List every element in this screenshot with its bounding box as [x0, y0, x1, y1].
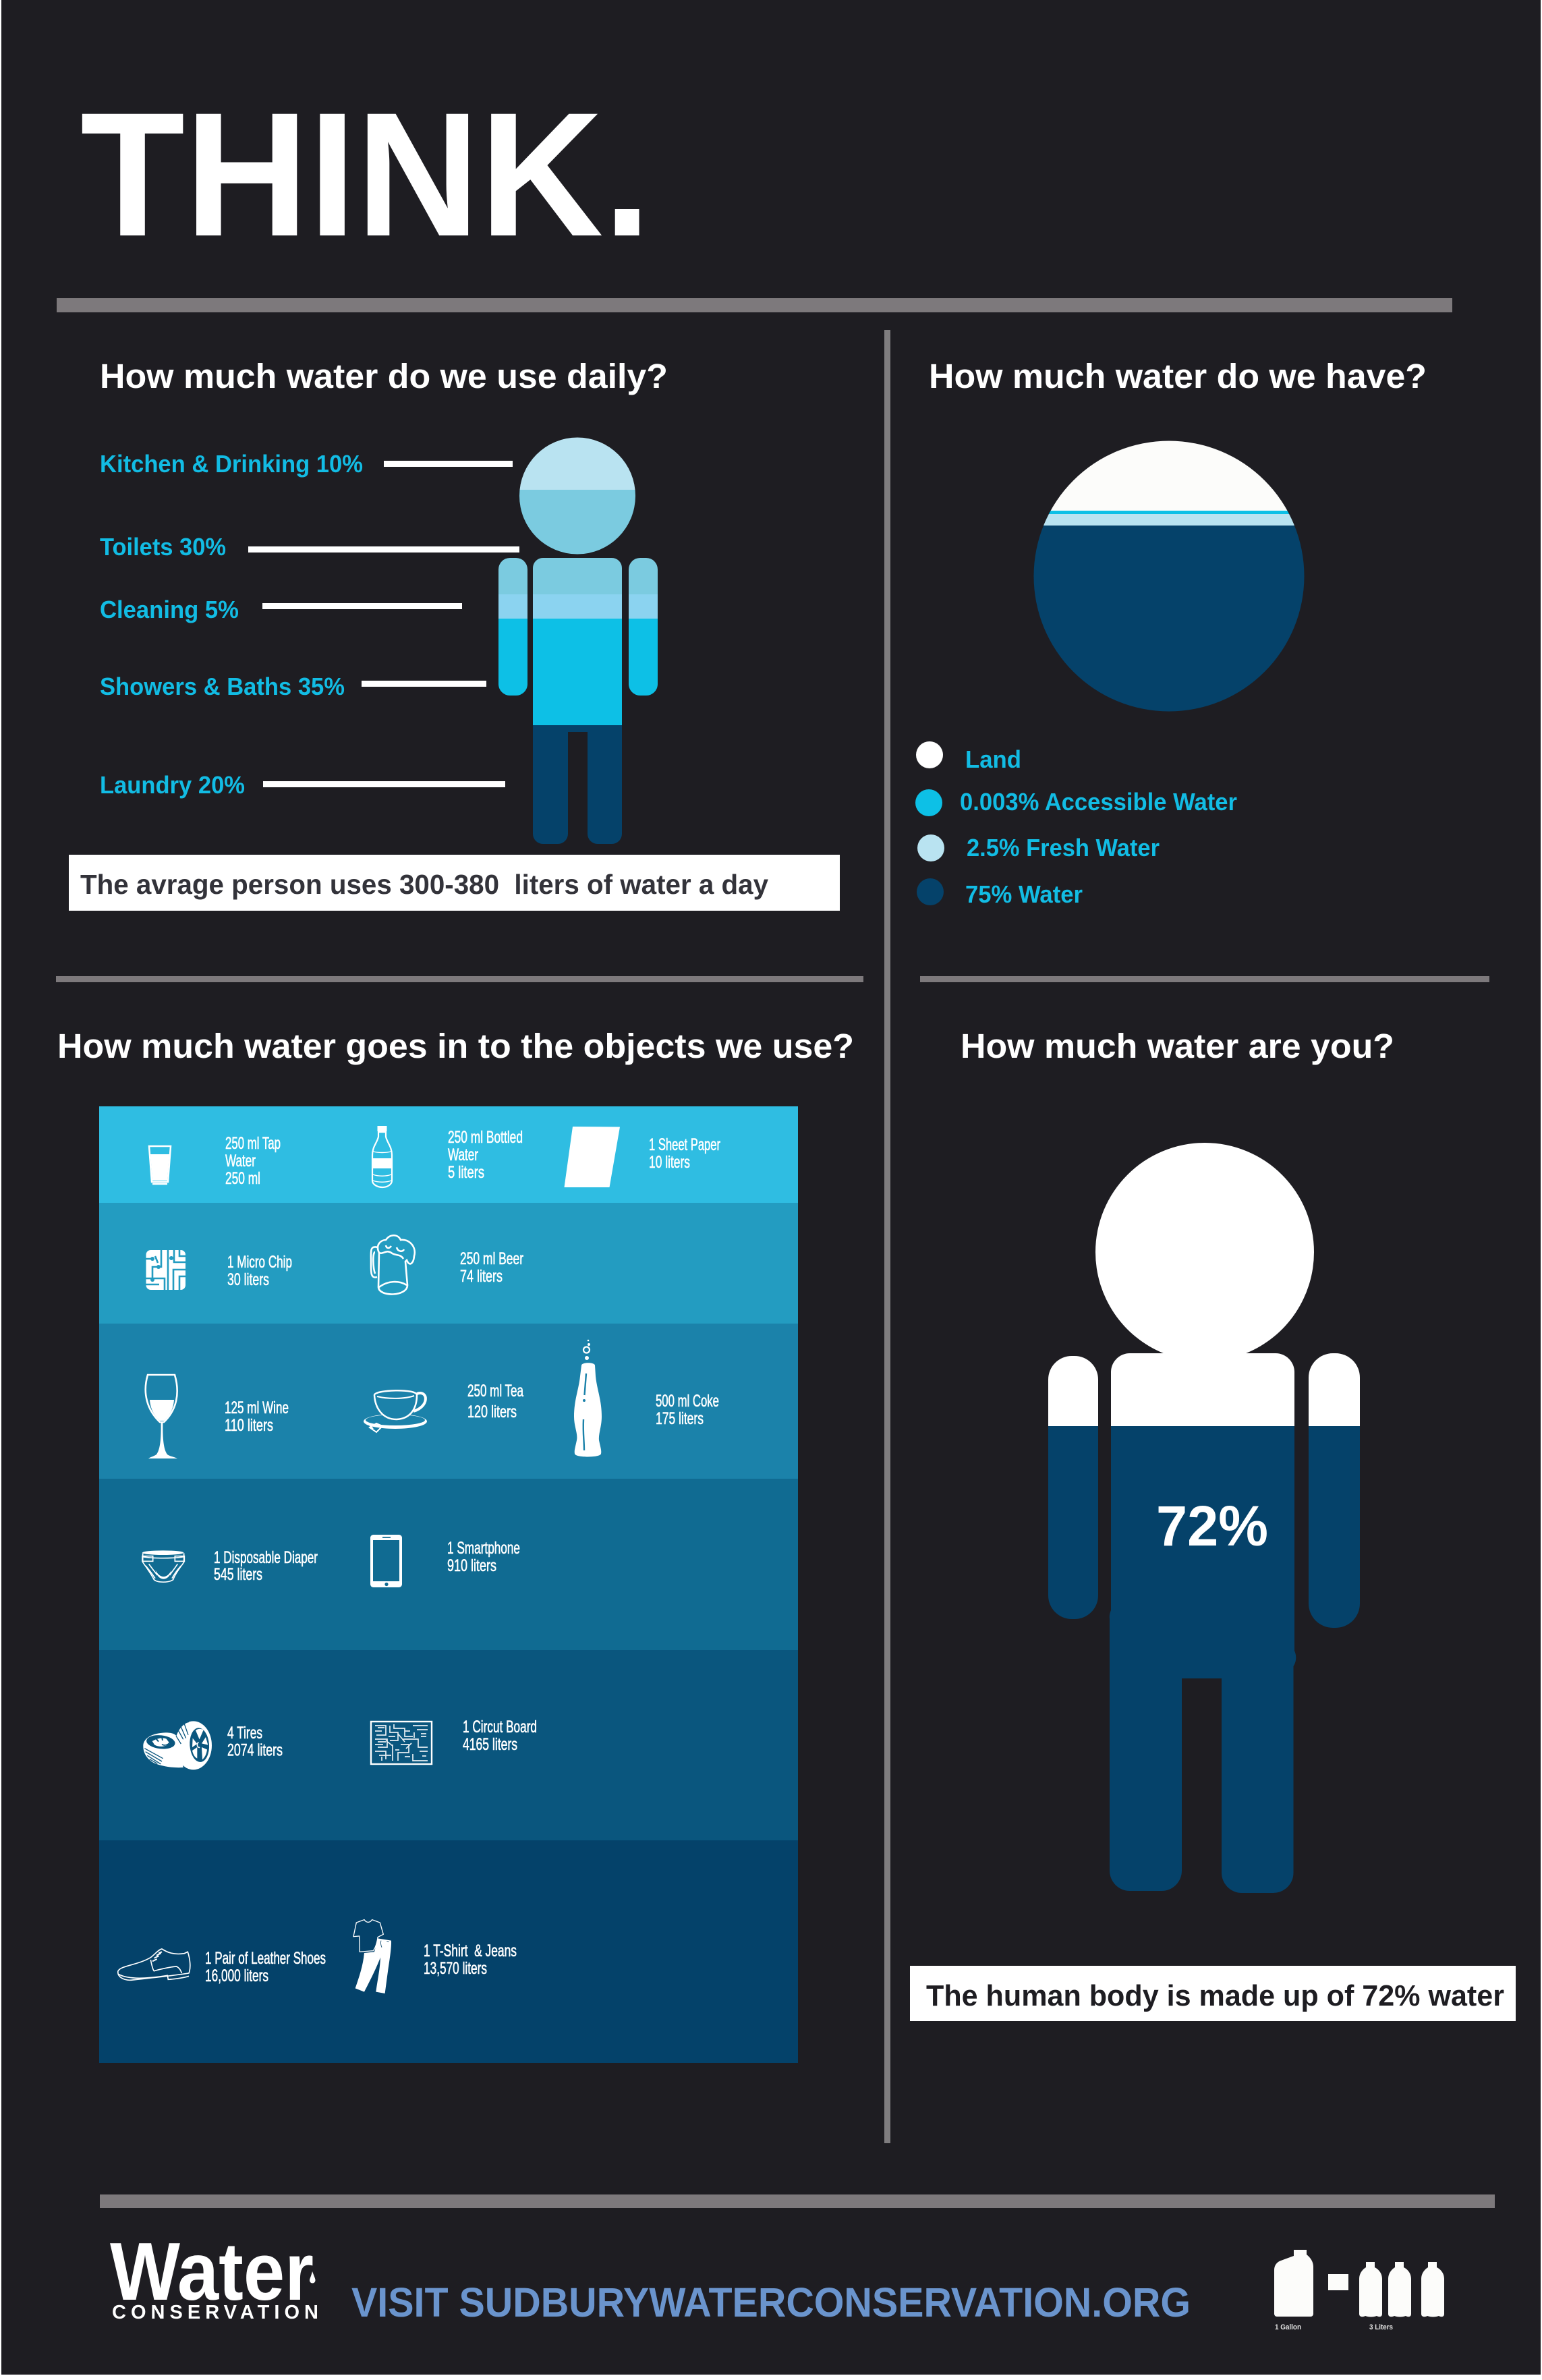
icon: circuit board	[371, 1722, 432, 1764]
legend: 75% Water	[965, 880, 1083, 908]
heading: daily use: How much water do we use daily?	[100, 357, 668, 395]
text: wine	[225, 1398, 289, 1435]
legend	[915, 741, 1237, 908]
text: coke	[656, 1392, 719, 1428]
logo: water conservation: CONSERVATION	[112, 2302, 318, 2323]
icon: smartphone	[370, 1535, 402, 1587]
text: circuit board	[463, 1718, 537, 1754]
text: beer: 250 ml Beer	[460, 1249, 523, 1268]
text: t-shirt and jeans: 13,570 liters	[424, 1959, 487, 1978]
text: tap water: 250 ml Tap	[225, 1134, 281, 1153]
icon: water glass	[149, 1146, 171, 1184]
text: beer	[460, 1249, 523, 1286]
legend: Land	[965, 745, 1021, 773]
text: smartphone: 910 liters	[447, 1556, 496, 1575]
text: diaper	[214, 1548, 318, 1584]
icon: gallon equals three liters	[1274, 2250, 1444, 2331]
text: t-shirt and jeans: 1 T-Shirt & Jeans	[424, 1942, 517, 1960]
text: tea: 250 ml Tea	[467, 1382, 523, 1400]
text: tap water	[225, 1134, 281, 1188]
text: coke: 175 liters	[656, 1409, 704, 1428]
text: circuit board: 4165 liters	[463, 1735, 517, 1754]
text: leather shoes	[205, 1949, 326, 1985]
text: leather shoes: 16,000 liters	[205, 1966, 268, 1985]
text: paper	[649, 1135, 720, 1172]
text: tires: 4 Tires	[227, 1724, 262, 1743]
figure: person 72 percent water	[1046, 1140, 1369, 1898]
text: bottled water: 5 liters	[448, 1163, 484, 1182]
text: leather shoes: 1 Pair of Leather Shoes	[205, 1949, 326, 1968]
text: wine: 125 ml Wine	[225, 1398, 289, 1417]
label: cleaning: Cleaning 5%	[100, 596, 239, 623]
panel: how much water are you	[910, 1027, 1516, 2021]
callout: average use	[69, 855, 840, 911]
icon: t-shirt and jeans	[353, 1920, 391, 1993]
footer	[110, 2226, 1444, 2331]
figure: person split by usage	[492, 437, 661, 847]
callout: human body: The human body is made up of 72% water	[926, 1979, 1504, 2012]
text: micro chip	[227, 1253, 292, 1289]
text: tap water: 250 ml	[225, 1169, 260, 1188]
text: tap water: Water	[225, 1152, 256, 1170]
text: tea: 120 liters	[467, 1402, 517, 1421]
icon: tires	[143, 1721, 212, 1769]
label: kitchen: Kitchen & Drinking 10%	[100, 450, 363, 478]
label: showers: Showers & Baths 35%	[100, 673, 345, 700]
label: toilets: Toilets 30%	[100, 533, 226, 561]
text: paper: 10 liters	[649, 1153, 690, 1172]
leader lines	[248, 461, 519, 787]
icon: gallon equals three liters: 1 Gallon	[1275, 2323, 1301, 2331]
icon: gallon equals three liters: 3 Liters	[1369, 2323, 1393, 2331]
text: wine: 110 liters	[225, 1416, 273, 1435]
text: bottled water	[448, 1128, 523, 1182]
text: circuit board: 1 Circut Board	[463, 1718, 537, 1736]
link text: VISIT SUDBURYWATERCONSERVATION.ORG	[351, 2279, 1191, 2325]
heading: objects: How much water goes in to the objects we use?	[57, 1027, 854, 1065]
chart: earth water circle	[1032, 438, 1309, 714]
callout: average use: The avrage person uses 300-380 liters of water a day	[80, 869, 768, 900]
panel: embedded water in objects	[57, 1027, 854, 2063]
text: diaper: 545 liters	[214, 1565, 262, 1584]
icon: sheet of paper	[564, 1127, 620, 1187]
text: tires: 2074 liters	[227, 1740, 283, 1759]
icon: wine glass	[146, 1375, 177, 1458]
logo: water conservation: Water	[110, 2226, 314, 2317]
icon: micro chip	[146, 1250, 185, 1290]
heading: water we have: How much water do we have?	[929, 357, 1427, 395]
title: THINK.	[80, 76, 651, 273]
icon: leather shoe	[118, 1949, 190, 1980]
icon: diaper	[142, 1550, 184, 1582]
text: micro chip: 30 liters	[227, 1270, 269, 1289]
value: 72%: 72%	[1156, 1494, 1268, 1558]
icon: coke bottle	[574, 1340, 602, 1457]
text: smartphone	[447, 1539, 520, 1575]
callout: human body	[910, 1966, 1516, 2021]
icon: beer mug	[371, 1235, 415, 1295]
text: beer: 74 liters	[460, 1267, 503, 1286]
icon: tea cup	[364, 1390, 427, 1432]
text: t-shirt and jeans	[424, 1942, 517, 1978]
panel: how much water we have	[915, 357, 1427, 908]
text: tires	[227, 1724, 283, 1759]
legend: 2.5% Fresh Water	[967, 834, 1160, 861]
text: coke: 500 ml Coke	[656, 1392, 719, 1411]
table bands	[99, 1106, 798, 2063]
text: tea	[467, 1382, 523, 1421]
panel: daily water use	[69, 357, 840, 911]
heading: water are you: How much water are you?	[961, 1027, 1394, 1065]
text: diaper: 1 Disposable Diaper	[214, 1548, 318, 1567]
text: bottled water: Water	[448, 1145, 478, 1164]
text: micro chip: 1 Micro Chip	[227, 1253, 292, 1272]
text: bottled water: 250 ml Bottled	[448, 1128, 523, 1147]
text: smartphone: 1 Smartphone	[447, 1539, 520, 1558]
legend: 0.003% Accessible Water	[960, 788, 1237, 816]
label: laundry: Laundry 20%	[100, 771, 245, 799]
text: paper: 1 Sheet Paper	[649, 1135, 720, 1154]
icon: plastic bottle	[372, 1126, 392, 1187]
